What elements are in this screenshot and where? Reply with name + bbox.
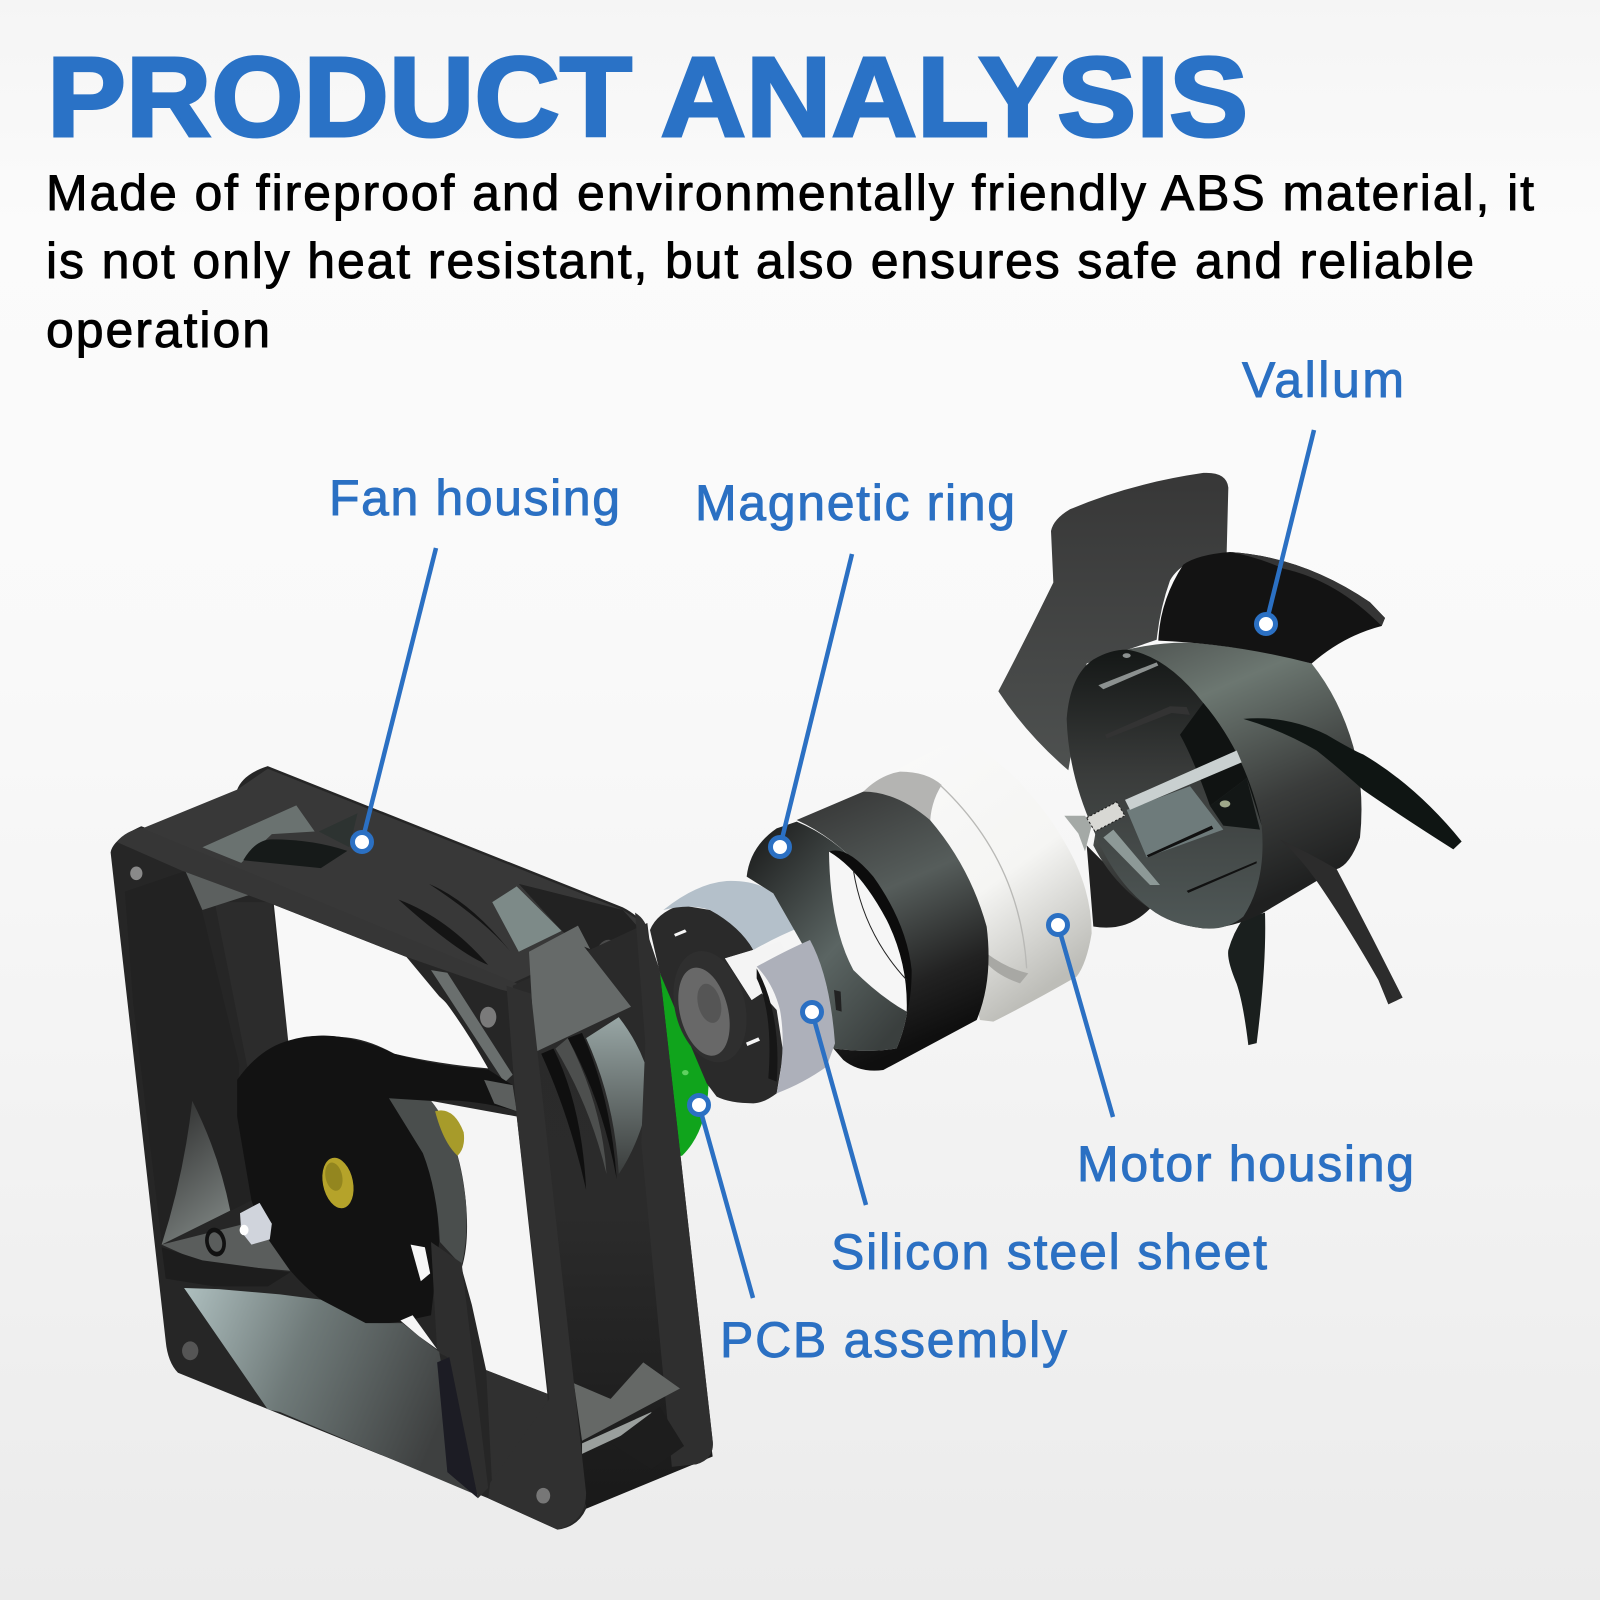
callout: PCB assembly xyxy=(690,1096,1067,1368)
component: PCB assembly disc xyxy=(651,970,709,1158)
corner mounts xyxy=(182,1341,198,1360)
component: motor housing xyxy=(863,743,1092,1022)
icon: fan exploded assembly xyxy=(111,473,1462,1530)
callout: Magnetic ring xyxy=(695,475,1015,856)
component: magnetic ring xyxy=(747,792,989,1093)
callout: Silicon steel sheet xyxy=(802,1002,1267,1280)
callout: Motor housing xyxy=(1048,916,1414,1192)
motor hub xyxy=(237,1036,517,1324)
top face xyxy=(141,769,643,983)
callout: Vallum xyxy=(1242,352,1404,634)
description text: operation xyxy=(46,302,270,358)
callout: Motor housing: Motor housing xyxy=(1077,1136,1414,1192)
callout: PCB assembly: PCB assembly xyxy=(720,1312,1067,1368)
front right frame strip xyxy=(488,986,586,1530)
back frame strip xyxy=(635,913,713,1467)
housing silhouette xyxy=(111,766,713,1530)
opening upper xyxy=(274,905,488,1068)
wedge with clip xyxy=(162,1221,290,1271)
right side face xyxy=(513,923,713,1509)
component: vallum fan blades xyxy=(998,473,1462,1045)
title: PRODUCT ANALYSIS xyxy=(47,34,1248,160)
icon: yellow shaft xyxy=(317,1152,359,1214)
description text: is not only heat resistant, but also ensures safe and reliable xyxy=(46,233,1474,289)
description text: Made of fireproof and environmentally friendly ABS material, it xyxy=(46,165,1534,221)
component: fan housing xyxy=(111,766,713,1530)
lower blade xyxy=(184,1288,472,1493)
callout: Fan housing xyxy=(329,470,620,852)
icon: yellow bearing pin xyxy=(435,1110,464,1156)
component: silicon steel sheet and stator xyxy=(650,881,802,1103)
opening right xyxy=(431,1101,547,1394)
lower strut xyxy=(431,1242,488,1498)
description text xyxy=(46,165,1534,358)
callout: Magnetic ring: Magnetic ring xyxy=(695,475,1015,531)
callout: Vallum: Vallum xyxy=(1242,352,1404,408)
callout: Silicon steel sheet: Silicon steel sheet xyxy=(831,1224,1267,1280)
front top band xyxy=(117,828,529,996)
bearing mount xyxy=(389,1098,467,1266)
callout: Fan housing: Fan housing xyxy=(329,470,620,526)
left wall xyxy=(125,871,251,1242)
